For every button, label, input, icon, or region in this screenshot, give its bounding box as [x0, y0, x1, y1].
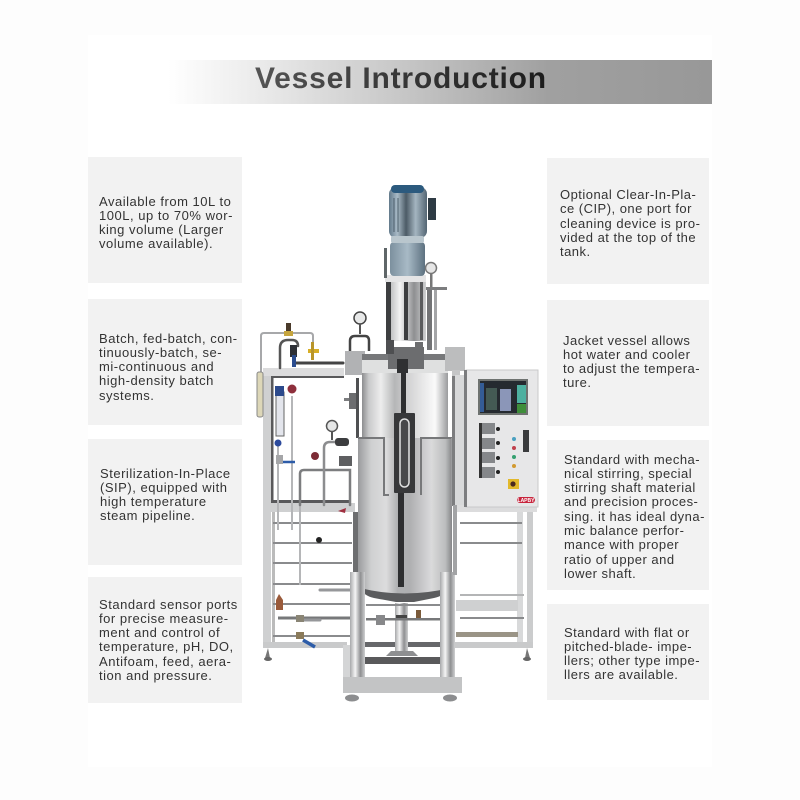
panel: sterilization in place: steam pipeline. — [100, 508, 195, 523]
panel: batch systems: systems. — [99, 388, 154, 403]
panel: jacket vessel: ture. — [563, 375, 591, 390]
panel: sterilization in place: high temperature — [100, 494, 207, 509]
rear frame — [263, 368, 537, 661]
panel: sensor ports: for precise measure- — [99, 611, 229, 626]
panel: batch systems: tinuously-batch, se- — [99, 345, 222, 360]
panel: mechanical stirring — [547, 440, 709, 590]
panel: jacket vessel — [547, 300, 709, 426]
panel: available volume: volume available). — [99, 236, 213, 251]
panel: available volume — [88, 157, 242, 283]
legs and base — [343, 375, 464, 702]
panel: available volume: Available from 10L to — [99, 194, 231, 208]
panel: sensor ports: tion and pressure. — [99, 668, 212, 683]
panel: batch systems: mi-continuous and — [99, 359, 214, 374]
control switches — [479, 423, 500, 478]
indicator lights — [508, 430, 529, 489]
panel: mechanical stirring: lower shaft. — [564, 566, 636, 581]
panel: mechanical stirring: nical stirring, special — [564, 466, 692, 481]
panel: sensor ports — [88, 577, 242, 703]
white page card — [88, 35, 712, 767]
panel: mechanical stirring: mance with proper — [564, 537, 679, 552]
piping and valves — [261, 333, 350, 620]
panel: sensor ports: Antifoam, feed, aera- — [99, 654, 231, 669]
panel: mechanical stirring: ratio of upper and — [564, 552, 675, 567]
panel: sterilization in place: (SIP), equipped with — [100, 480, 227, 495]
panel: available volume: 100L, up to 70% wor- — [99, 208, 233, 223]
panel: mechanical stirring: stirring shaft material — [564, 480, 696, 495]
panel: jacket vessel: to adjust the tempera- — [563, 361, 700, 376]
panel: mechanical stirring: mic balance perfor- — [564, 523, 684, 538]
panel: mechanical stirring: and precision proces- — [564, 494, 698, 509]
panel: impellers: llers are available. — [564, 667, 678, 682]
sight glass — [394, 413, 415, 493]
control cabinet — [464, 370, 538, 507]
touch screen — [478, 379, 528, 415]
panel: clean in place — [547, 158, 709, 284]
panel: sensor ports: ment and control of — [99, 625, 220, 640]
panel: impellers: pitched-blade- impe- — [564, 639, 692, 654]
panel: mechanical stirring: sing. it has ideal dyna- — [564, 509, 705, 524]
panel: clean in place: cleaning device is pro- — [560, 216, 700, 231]
panel: impellers: Standard with flat or — [564, 624, 690, 640]
panel: sensor ports: Standard sensor ports — [99, 596, 238, 612]
panel: batch systems: high-density batch — [99, 373, 214, 388]
panel: impellers — [547, 604, 709, 700]
brand badge: LAPBY — [518, 498, 535, 504]
panel: sterilization in place: Sterilization-In-Place — [100, 466, 231, 480]
panel: batch systems: Batch, fed-batch, con- — [99, 330, 238, 346]
bottom valve assembly — [366, 603, 440, 656]
panel: batch systems — [88, 299, 242, 425]
panel: clean in place: ce (CIP), one port for — [560, 201, 692, 216]
panel: clean in place: tank. — [560, 244, 591, 259]
panel: sterilization in place — [88, 439, 242, 565]
panel: clean in place: vided at the top of the — [560, 230, 696, 245]
panel: impellers: llers; other type impe- — [564, 653, 700, 668]
side gauge post — [426, 262, 447, 350]
panel: clean in place: Optional Clear-In-Pla- — [560, 187, 696, 202]
panel: jacket vessel: hot water and cooler — [563, 347, 690, 362]
panel: mechanical stirring: Standard with mecha- — [564, 452, 700, 466]
panel: available volume: king volume (Larger — [99, 222, 224, 237]
title band — [168, 60, 712, 104]
panel: sensor ports: temperature, pH, DO, — [99, 639, 234, 654]
flow meters, valves and gauges at left — [257, 312, 369, 647]
vessel body — [358, 373, 452, 602]
top flange — [345, 340, 465, 388]
panel: jacket vessel: Jacket vessel allows — [563, 332, 690, 348]
jacket pipes — [358, 438, 452, 506]
title: Vessel Introduction — [255, 62, 547, 95]
agitator shaft and motor — [384, 185, 436, 341]
